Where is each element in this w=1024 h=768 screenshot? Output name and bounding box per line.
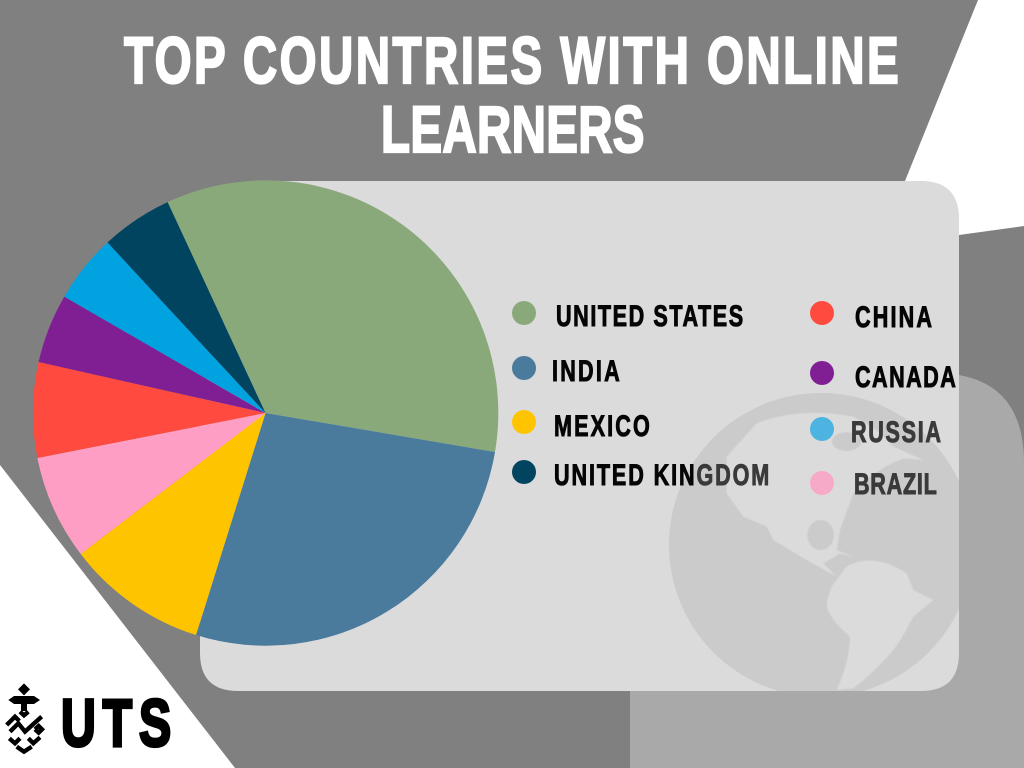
slice: United States: [168, 180, 498, 452]
background: lighter grey rounded panel: [630, 373, 1024, 768]
background: white top-right shape: [905, 0, 1024, 235]
legend item: Canada: [810, 359, 956, 394]
panel: light grey card: [200, 181, 959, 691]
icon: UTS emblem: [7, 683, 42, 752]
logo: UTS: [7, 683, 171, 761]
legend item: China: [810, 299, 932, 334]
legend item: China: CHINA: [855, 299, 932, 334]
legend item: India: [512, 353, 620, 388]
legend item: United States: UNITED STATES: [556, 298, 743, 333]
slice: India: [196, 413, 495, 646]
pie chart: [33, 180, 498, 646]
legend item: India: INDIA: [552, 353, 620, 388]
title: [124, 24, 899, 167]
background: white bottom-left triangle: [0, 465, 235, 768]
icon: faded globe: [669, 393, 973, 697]
legend item: Russia: [810, 414, 941, 449]
slice: United Kingdom: [108, 202, 266, 413]
slice: Brazil: [37, 413, 266, 554]
slice: Russia: [64, 242, 266, 413]
legend item: Mexico: [512, 408, 650, 443]
legend: [512, 298, 956, 501]
legend item: Russia: RUSSIA: [851, 414, 941, 449]
legend item: Canada: CANADA: [855, 359, 956, 394]
legend item: United Kingdom: UNITED KINGDOM: [554, 457, 769, 492]
slice: Mexico: [81, 413, 266, 635]
logo wordmark: UTS: [61, 686, 171, 761]
slice: Canada: [39, 297, 265, 413]
title: LEARNERS: [381, 93, 645, 167]
title: TOP COUNTRIES WITH ONLINE: [124, 24, 899, 98]
legend item: Brazil: [810, 466, 937, 501]
legend item: Brazil: BRAZIL: [854, 466, 937, 501]
legend item: Mexico: MEXICO: [554, 408, 650, 443]
slice: China: [33, 362, 266, 458]
